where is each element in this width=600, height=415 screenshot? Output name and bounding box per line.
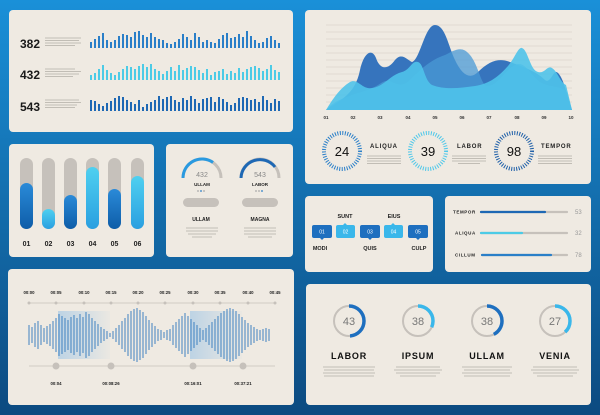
numbers: 432 [20,68,40,82]
panel: gauges: LABOR [252,182,269,187]
panel: donut stats: 27 [549,316,561,328]
panel: audio waveform: 00:05 [50,290,62,295]
panel: audio waveform: 00:04 [50,381,62,386]
panel: audio waveform: 00:25 [160,290,171,295]
panel: audio waveform: 00:45 [270,290,281,295]
panel: tabs: EIUS [388,214,401,220]
panel: area chart: TEMPOR [541,144,571,150]
x labels: 04 [405,115,411,120]
x labels: 08 [514,115,520,120]
panel: progress bars: CILLUM [455,252,476,258]
x labels: 01 [323,115,329,120]
panel: tabs: MODI [313,246,328,252]
labels: 04 [89,241,96,248]
panel: donut stats: ULLAM [469,351,505,361]
panel: donut stats: 43 [343,316,355,328]
panel: donut stats: 38 [412,316,424,328]
numbers [20,37,40,114]
area: dark [326,25,572,110]
panel: tabs: 04 [391,230,396,236]
labels: 02 [45,241,52,248]
area: light [326,48,572,110]
panel: donut stats: 38 [481,316,493,328]
panel: progress bars [445,196,591,272]
panel: audio waveform [8,269,294,405]
x labels: 06 [459,115,465,120]
panel: gauges: 432 [196,172,208,179]
panel: audio waveform: 00:30 [188,290,199,295]
text blocks [45,38,81,108]
x labels: 10 [568,115,574,120]
panel: audio waveform: 00:15 [106,290,117,295]
area: medium [326,49,572,110]
panel: gauges: MAGNA [251,217,270,223]
x labels: 05 [432,115,438,120]
panel: gauges: ULLAM [192,217,210,223]
bar chart row 1 [91,31,279,48]
panel: audio waveform: 00:10 [78,290,90,295]
panel: audio waveform: 00:16:01 [184,381,202,386]
panel: area chart [305,10,591,184]
x labels: 03 [377,115,383,120]
panel: audio waveform: 00:37:21 [234,381,252,386]
panel: area chart: 98 [507,144,521,159]
panel: tabs: QUIS [363,246,377,252]
panel: audio waveform: 00:35 [214,290,226,295]
bar chart row 2 [91,64,279,80]
bar chart row 3 [91,96,279,111]
panel: gauges: ULLAM [194,182,210,187]
panel: tabs: SUNT [338,214,353,220]
panel: tabs: 02 [343,230,348,236]
panel: gauges [166,144,293,257]
panel: vertical bars [9,144,154,257]
labels: 01 [23,241,30,248]
labels: 03 [67,241,74,248]
x labels: 02 [350,115,356,120]
panel: tabs [305,196,433,272]
ring stats [324,133,532,169]
panel: donut stats: LABOR [331,351,367,361]
panel: progress bars: 32 [575,231,582,237]
panel: tabs: 05 [415,230,421,236]
x labels [323,115,574,120]
panel: area chart: LABOR [457,144,482,150]
panel: progress bars: ALIQUA [455,230,476,236]
panel: waveform rows [9,10,293,132]
labels: 05 [111,241,118,248]
panel: tabs: CULP [412,246,427,252]
x labels: 09 [541,115,547,120]
panel: area chart: ALIQUA [370,144,398,150]
panel: audio waveform: 00:20 [132,290,144,295]
panel: donut stats [306,284,591,405]
panel: progress bars: 78 [575,253,582,259]
panel: audio waveform: 00:00 [24,290,35,295]
panel: donut stats: VENIA [539,351,571,361]
numbers: 543 [20,100,40,114]
panel: gauges: 543 [254,172,266,179]
x labels: 07 [486,115,492,120]
labels: 06 [134,241,141,248]
panel: audio waveform: 00:40 [242,290,254,295]
panel: audio waveform: 00:08:26 [102,381,120,386]
panel: progress bars: TEMPOR [453,210,476,214]
panel: tabs: 03 [367,230,373,236]
panel: area chart: 39 [421,144,435,159]
panel: progress bars: 53 [575,210,582,216]
panel: area chart: 24 [335,144,349,159]
panel: donut stats: IPSUM [402,351,434,361]
panel: tabs: 01 [319,230,325,236]
numbers: 382 [20,37,40,51]
labels [23,241,141,248]
